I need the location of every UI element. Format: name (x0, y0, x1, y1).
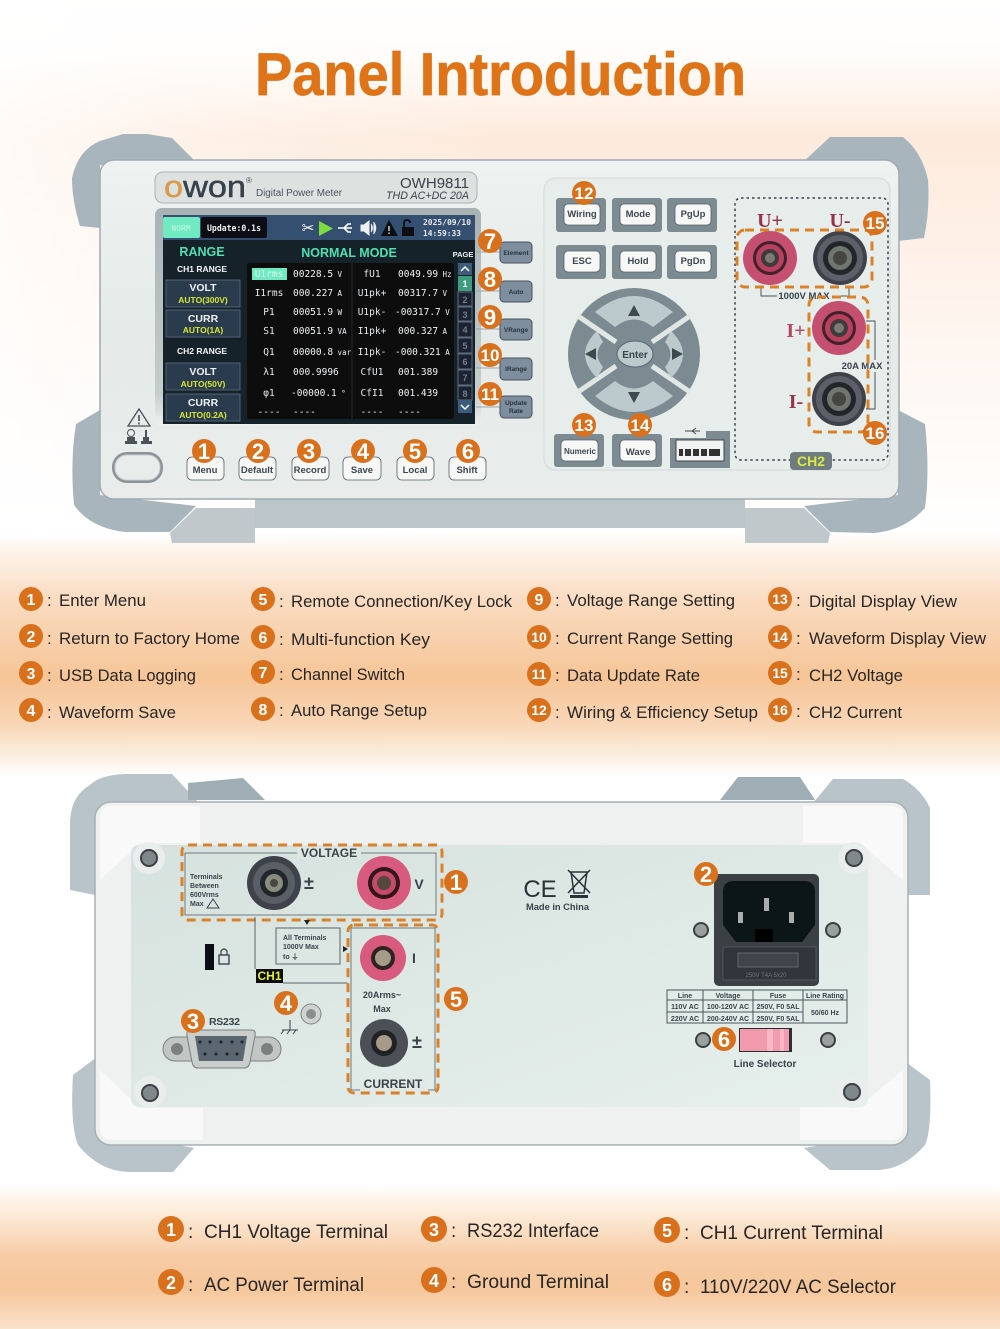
normal mode readings table: 00228.5 V (293, 269, 343, 280)
side soft keys: VRange (504, 327, 528, 334)
CH1 current block: 20Arms~ (363, 990, 401, 1000)
line selector switch: Line Selector (734, 1059, 796, 1070)
legend column 3: 11 (532, 666, 547, 682)
legend column 3: Current Range Setting (567, 629, 733, 648)
normal mode readings table: -00000.1 ° (291, 388, 346, 399)
normal mode readings table: 00051.9 VA (293, 326, 347, 337)
rear legend column 2: : (451, 1221, 456, 1242)
rear legend column 3: : (684, 1223, 689, 1244)
page selector: 2 (462, 295, 468, 305)
rear legend column 2: RS232 Interface (467, 1221, 599, 1242)
CH2 terminal labels: U- (829, 210, 851, 232)
page selector: 6 (462, 357, 468, 367)
bottom function keys: Record (294, 465, 327, 476)
rear legend column 3 (654, 1217, 897, 1298)
range sidebar: AUTO(300V) (178, 295, 228, 305)
CH1 voltage block: Max (190, 901, 204, 908)
line rating table (667, 990, 847, 1023)
all terminals note (276, 920, 348, 964)
normal mode readings table: λ1 (263, 367, 275, 378)
rear legend column 2 (421, 1216, 609, 1293)
logo plate: OWH9811 (400, 175, 469, 192)
CH1 voltage dashed highlight (182, 845, 442, 920)
legend column 2 (251, 587, 512, 721)
rear callout numbers: 1 (450, 870, 462, 895)
all terminals note: to ⏚ (283, 953, 299, 961)
normal mode readings table (247, 246, 473, 419)
normal mode readings table: CfI1 (361, 388, 384, 399)
range sidebar: CH2 RANGE (177, 346, 227, 356)
range sidebar: AUTO(1A) (183, 325, 223, 335)
function keys: ESC (572, 256, 592, 267)
range sidebar: VOLT (189, 282, 217, 294)
front callout numbers: 16 (866, 424, 884, 443)
side soft keys (476, 242, 532, 418)
bottom function keys: Save (351, 465, 373, 476)
CH1 current block: I (412, 950, 416, 966)
legend column 4: 16 (772, 702, 788, 718)
normal mode readings table: 001.389 (398, 367, 438, 378)
legend column 2: : (279, 592, 284, 611)
CH1 voltage block: 600Vrms (190, 892, 219, 899)
CH1 current block: ± (412, 1032, 422, 1052)
legend column 4: : (796, 702, 801, 721)
line rating table: 250V, F0 5AL (757, 1016, 800, 1023)
certification marks: Made in China (526, 902, 590, 913)
rear legend column 2: 4 (429, 1271, 439, 1291)
USB port (670, 428, 730, 468)
front legend (19, 587, 987, 722)
logo plate: THD AC+DC 20A (386, 190, 469, 202)
normal mode readings table: U1pk- (358, 307, 386, 318)
legend column 1: : (47, 703, 52, 722)
CH2 terminal labels (757, 210, 883, 413)
rear legend column 3: 5 (662, 1221, 672, 1241)
screen header bar: ✂ (302, 220, 314, 237)
ground terminal (281, 1004, 321, 1034)
side soft keys: Auto (509, 289, 523, 296)
page selector (458, 263, 472, 413)
CH2 dotted region (735, 198, 888, 470)
U- terminal (813, 231, 867, 285)
CH2 terminal labels: U+ (757, 210, 783, 232)
legend column 1: 3 (27, 666, 36, 683)
legend column 3 (527, 587, 758, 722)
legend column 3: : (555, 591, 560, 610)
rear callout numbers: 6 (718, 1027, 730, 1052)
legend column 3: Wiring & Efficiency Setup (567, 703, 758, 722)
range sidebar: CURR (188, 397, 219, 409)
logo plate: owon (164, 169, 246, 204)
rear legend column 1: 1 (166, 1220, 176, 1240)
logo plate: ® (246, 176, 252, 185)
bottom function keys: Local (403, 465, 427, 476)
control panel outline (544, 178, 890, 470)
front callout numbers: 15 (866, 214, 884, 233)
legend column 4: Waveform Display View (809, 629, 987, 648)
normal mode readings table: fU1 (363, 269, 381, 280)
front callout numbers: 10 (481, 346, 499, 365)
normal mode readings table: CfU1 (361, 367, 384, 378)
line rating table: Line (678, 993, 692, 1000)
legend column 1: : (47, 591, 52, 610)
CH1 voltage block (185, 845, 436, 915)
side soft keys: Rate (509, 408, 523, 415)
legend column 3: 10 (531, 629, 547, 645)
corner screws (141, 850, 862, 1101)
front callout numbers: 3 (303, 439, 315, 464)
CH2 voltage dashed highlight (737, 230, 872, 287)
screen header bar: NORM (171, 224, 191, 233)
legend column 2: Remote Connection/Key Lock (291, 592, 512, 611)
legend column 3: : (555, 666, 560, 685)
rear callout numbers: 5 (450, 987, 462, 1012)
line rating table: 200-240V AC (707, 1016, 749, 1023)
legend column 4: 13 (772, 591, 788, 607)
function keys: PgDn (681, 256, 706, 267)
function keys: PgUp (681, 209, 706, 220)
legend column 4: CH2 Current (809, 703, 902, 722)
page selector: 8 (462, 389, 468, 399)
CH1 label and leader: CH1 (257, 969, 282, 983)
navigation pad: Enter (622, 350, 648, 361)
legend column 1: Return to Factory Home (59, 629, 240, 648)
legend column 3: Data Update Rate (567, 666, 700, 685)
CH2 terminal labels: 20A MAX (842, 361, 883, 372)
line rating table: Fuse (770, 993, 786, 1000)
rear legend (158, 1216, 897, 1298)
screen header bar (163, 215, 475, 240)
bottom function keys: Shift (456, 465, 478, 476)
CH1 current block: CURRENT (364, 1077, 423, 1091)
rear corner highlights (100, 806, 903, 1140)
rear panel body (95, 802, 908, 1145)
legend column 4 (768, 587, 987, 722)
legend column 1: USB Data Logging (59, 666, 196, 685)
function keys: Wiring (567, 209, 597, 220)
front panel body (100, 160, 899, 499)
range sidebar: AUTO(0.2A) (179, 410, 227, 420)
normal mode readings table: 000.9996 (293, 367, 339, 378)
range sidebar: RANGE (179, 245, 225, 259)
front callout numbers: 11 (481, 385, 499, 404)
legend column 3: : (555, 703, 560, 722)
side soft keys: IRange (505, 366, 527, 373)
rear legend column 1: : (188, 1275, 193, 1296)
range sidebar: CH1 RANGE (177, 264, 227, 274)
range sidebar (166, 245, 240, 421)
normal mode readings table: NORMAL MODE (301, 246, 397, 260)
rear bumpers (70, 774, 930, 1172)
legend column 3: 12 (531, 702, 547, 718)
function keys: Numeric (564, 447, 597, 456)
normal mode readings table: I1pk+ (358, 326, 387, 337)
normal mode readings table: 000.227 A (293, 288, 343, 299)
line rating table: Line Rating (806, 993, 844, 1000)
navigation pad (568, 288, 700, 420)
normal mode readings table: ---- (398, 407, 421, 418)
front callout numbers: 4 (357, 439, 370, 464)
front callout numbers: 7 (484, 229, 496, 254)
function keys: Wave (626, 447, 650, 458)
normal mode readings table: 000.327 A (398, 326, 448, 337)
legend column 1: : (47, 666, 52, 685)
normal mode readings table: -00317.7 V (395, 307, 450, 318)
legend column 2: : (279, 701, 284, 720)
legend column 4: Digital Display View (809, 592, 958, 611)
legend column 1: 2 (27, 629, 36, 646)
rear legend column 2: : (451, 1272, 456, 1293)
page selector: 7 (462, 373, 468, 383)
line rating table: 50/60 Hz (811, 1010, 840, 1017)
legend column 1: Waveform Save (59, 703, 176, 722)
front callout numbers: 14 (631, 416, 650, 435)
corner bosses (133, 842, 870, 1108)
bottom function keys (187, 457, 486, 480)
CH1 voltage block: Between (190, 883, 219, 890)
all terminals note: 1000V Max (283, 944, 319, 951)
legend column 4: 14 (772, 629, 788, 645)
line rating table: Voltage (716, 993, 740, 1000)
CH2 dotted region: CH2 (797, 453, 825, 469)
AC power socket (714, 874, 819, 986)
front bumpers and feet (72, 134, 928, 543)
legend column 3: 9 (535, 592, 544, 609)
screen header bar: 14:59:33 (423, 229, 461, 238)
range sidebar: CURR (188, 313, 219, 325)
legend column 2: 8 (259, 702, 268, 719)
legend column 1: : (47, 629, 52, 648)
rear legend column 2: 3 (429, 1220, 439, 1240)
line rating table: 250V, F0 5AL (757, 1004, 800, 1011)
power button (112, 452, 163, 483)
function keys: Hold (627, 256, 649, 267)
rear legend column 3: CH1 Current Terminal (700, 1223, 883, 1244)
range sidebar: AUTO(50V) (181, 379, 226, 389)
line selector switch (734, 1028, 796, 1070)
logo plate (155, 169, 477, 204)
legend column 3: : (555, 629, 560, 648)
legend column 2: 6 (259, 630, 268, 647)
front callout numbers: 6 (462, 439, 474, 464)
front callout numbers: 12 (575, 184, 593, 203)
front callout numbers: 1 (198, 439, 210, 464)
normal mode readings table: P1 (263, 307, 275, 318)
front view of instrument (72, 134, 928, 543)
security lock slot (205, 944, 229, 970)
CH2 terminal labels: I- (789, 391, 803, 413)
LCD screen (163, 215, 475, 424)
function keys (554, 198, 717, 467)
logo plate: Digital Power Meter (256, 188, 343, 199)
bottom function keys: Menu (193, 465, 218, 476)
front callout numbers: 2 (252, 439, 264, 464)
normal mode readings table: 00051.9 W (293, 307, 343, 318)
rear callout numbers: 3 (187, 1009, 199, 1034)
normal mode readings table: ---- (258, 407, 280, 418)
legend column 2: : (279, 630, 284, 649)
front callout numbers: 13 (575, 416, 593, 435)
legend column 2: Multi-function Key (291, 630, 431, 649)
rear legend column 3: 110V/220V AC Selector (700, 1277, 897, 1298)
legend column 1: 1 (27, 592, 36, 609)
normal mode readings table: U1rms (255, 269, 283, 280)
rear recessed panel (131, 845, 868, 1107)
function keys: Mode (626, 209, 650, 220)
CH2 current dashed highlight (809, 297, 868, 432)
normal mode readings table: 00000.8 var (293, 347, 352, 358)
normal mode readings table: φ1 (263, 388, 275, 399)
rear legend column 3: : (684, 1277, 689, 1298)
legend column 1 (19, 587, 240, 722)
side screws for socket (694, 923, 840, 1047)
normal mode readings table: ---- (293, 407, 316, 418)
front callout numbers: 5 (409, 439, 421, 464)
line rating table: 110V AC (671, 1004, 699, 1011)
CH2 terminal labels: 1000V MAX (778, 291, 830, 302)
screen bezel (155, 208, 481, 426)
CH1 current block (351, 928, 435, 1092)
CH1 voltage block: V (414, 876, 424, 892)
normal mode readings table: ---- (361, 407, 383, 418)
front callout numbers: 9 (484, 305, 496, 330)
I- terminal (812, 372, 866, 426)
page selector: 3 (462, 310, 468, 320)
legend column 2: Auto Range Setup (291, 701, 427, 720)
certification marks: CE (523, 876, 557, 903)
legend column 1: Enter Menu (59, 591, 146, 610)
line rating table: 100-120V AC (707, 1004, 749, 1011)
bottom function keys: Default (241, 465, 274, 476)
screen header bar: Update:0.1s (207, 224, 261, 234)
legend column 4: : (796, 629, 801, 648)
I+ terminal (812, 301, 866, 355)
legend column 4: CH2 Voltage (809, 666, 903, 685)
normal mode readings table: I1pk- (358, 347, 386, 358)
front callout numbers (192, 181, 887, 464)
rear legend column 1: 2 (166, 1273, 176, 1293)
CH1 voltage block: Terminals (190, 874, 223, 881)
normal mode readings table: I1rms (255, 288, 283, 299)
range sidebar: VOLT (189, 366, 217, 378)
page selector: 5 (462, 341, 468, 351)
rear view of instrument (70, 774, 930, 1172)
screen header bar: 2025/09/10 (423, 218, 471, 227)
AC power socket: 250V T4A 5x20 (746, 973, 787, 979)
rear legend column 3: 6 (662, 1275, 672, 1295)
legend column 2: Channel Switch (291, 665, 405, 684)
CH1 current dashed highlight (348, 925, 438, 1093)
CH1 voltage block: VOLTAGE (301, 846, 357, 860)
legend column 3: Voltage Range Setting (567, 591, 735, 610)
CH1 current block: Max (373, 1004, 391, 1014)
CH2 terminal labels: I+ (786, 320, 806, 342)
side soft keys: Element (503, 250, 529, 257)
all terminals note: All Terminals (283, 935, 327, 942)
CH1 voltage block: ± (304, 873, 314, 893)
icon: safety warning (125, 409, 152, 444)
normal mode readings table: -000.321 A (395, 347, 450, 358)
page selector: 1 (462, 279, 468, 289)
legend column 4: 15 (772, 665, 788, 681)
normal mode readings table: PAGE (453, 250, 473, 259)
background left fade (0, 0, 500, 540)
rear legend column 1: CH1 Voltage Terminal (204, 1222, 388, 1243)
RS232 connector (163, 1016, 281, 1068)
page selector: 4 (462, 325, 468, 335)
rear legend column 1: AC Power Terminal (204, 1275, 364, 1296)
legend column 4: : (796, 665, 801, 684)
title: Panel Introduction (255, 41, 746, 108)
normal mode readings table: 0049.99 Hz (398, 269, 452, 280)
normal mode readings table: 001.439 (398, 388, 438, 399)
certification marks (523, 870, 590, 913)
legend column 1: 4 (27, 703, 36, 720)
front callout numbers: 8 (484, 267, 496, 292)
legend column 4: : (796, 591, 801, 610)
legend column 2: 7 (259, 665, 268, 682)
line rating table: 220V AC (671, 1016, 699, 1023)
normal mode readings table: U1pk+ (358, 288, 387, 299)
rear legend column 1 (158, 1216, 388, 1296)
rear callout numbers: 4 (280, 991, 293, 1016)
legend column 2: : (279, 665, 284, 684)
rear callout numbers (181, 862, 736, 1052)
side soft keys: Update (505, 400, 527, 407)
rear legend column 1: : (188, 1222, 193, 1243)
RS232 connector: RS232 (209, 1016, 240, 1028)
rear legend column 2: Ground Terminal (467, 1272, 609, 1293)
normal mode readings table: Q1 (263, 347, 275, 358)
rear callout numbers: 2 (700, 862, 712, 887)
U+ terminal (743, 231, 797, 285)
CH1 label and leader (255, 917, 347, 983)
normal mode readings table: 00317.7 V (398, 288, 448, 299)
legend column 2: 5 (259, 592, 268, 609)
normal mode readings table: S1 (263, 326, 275, 337)
